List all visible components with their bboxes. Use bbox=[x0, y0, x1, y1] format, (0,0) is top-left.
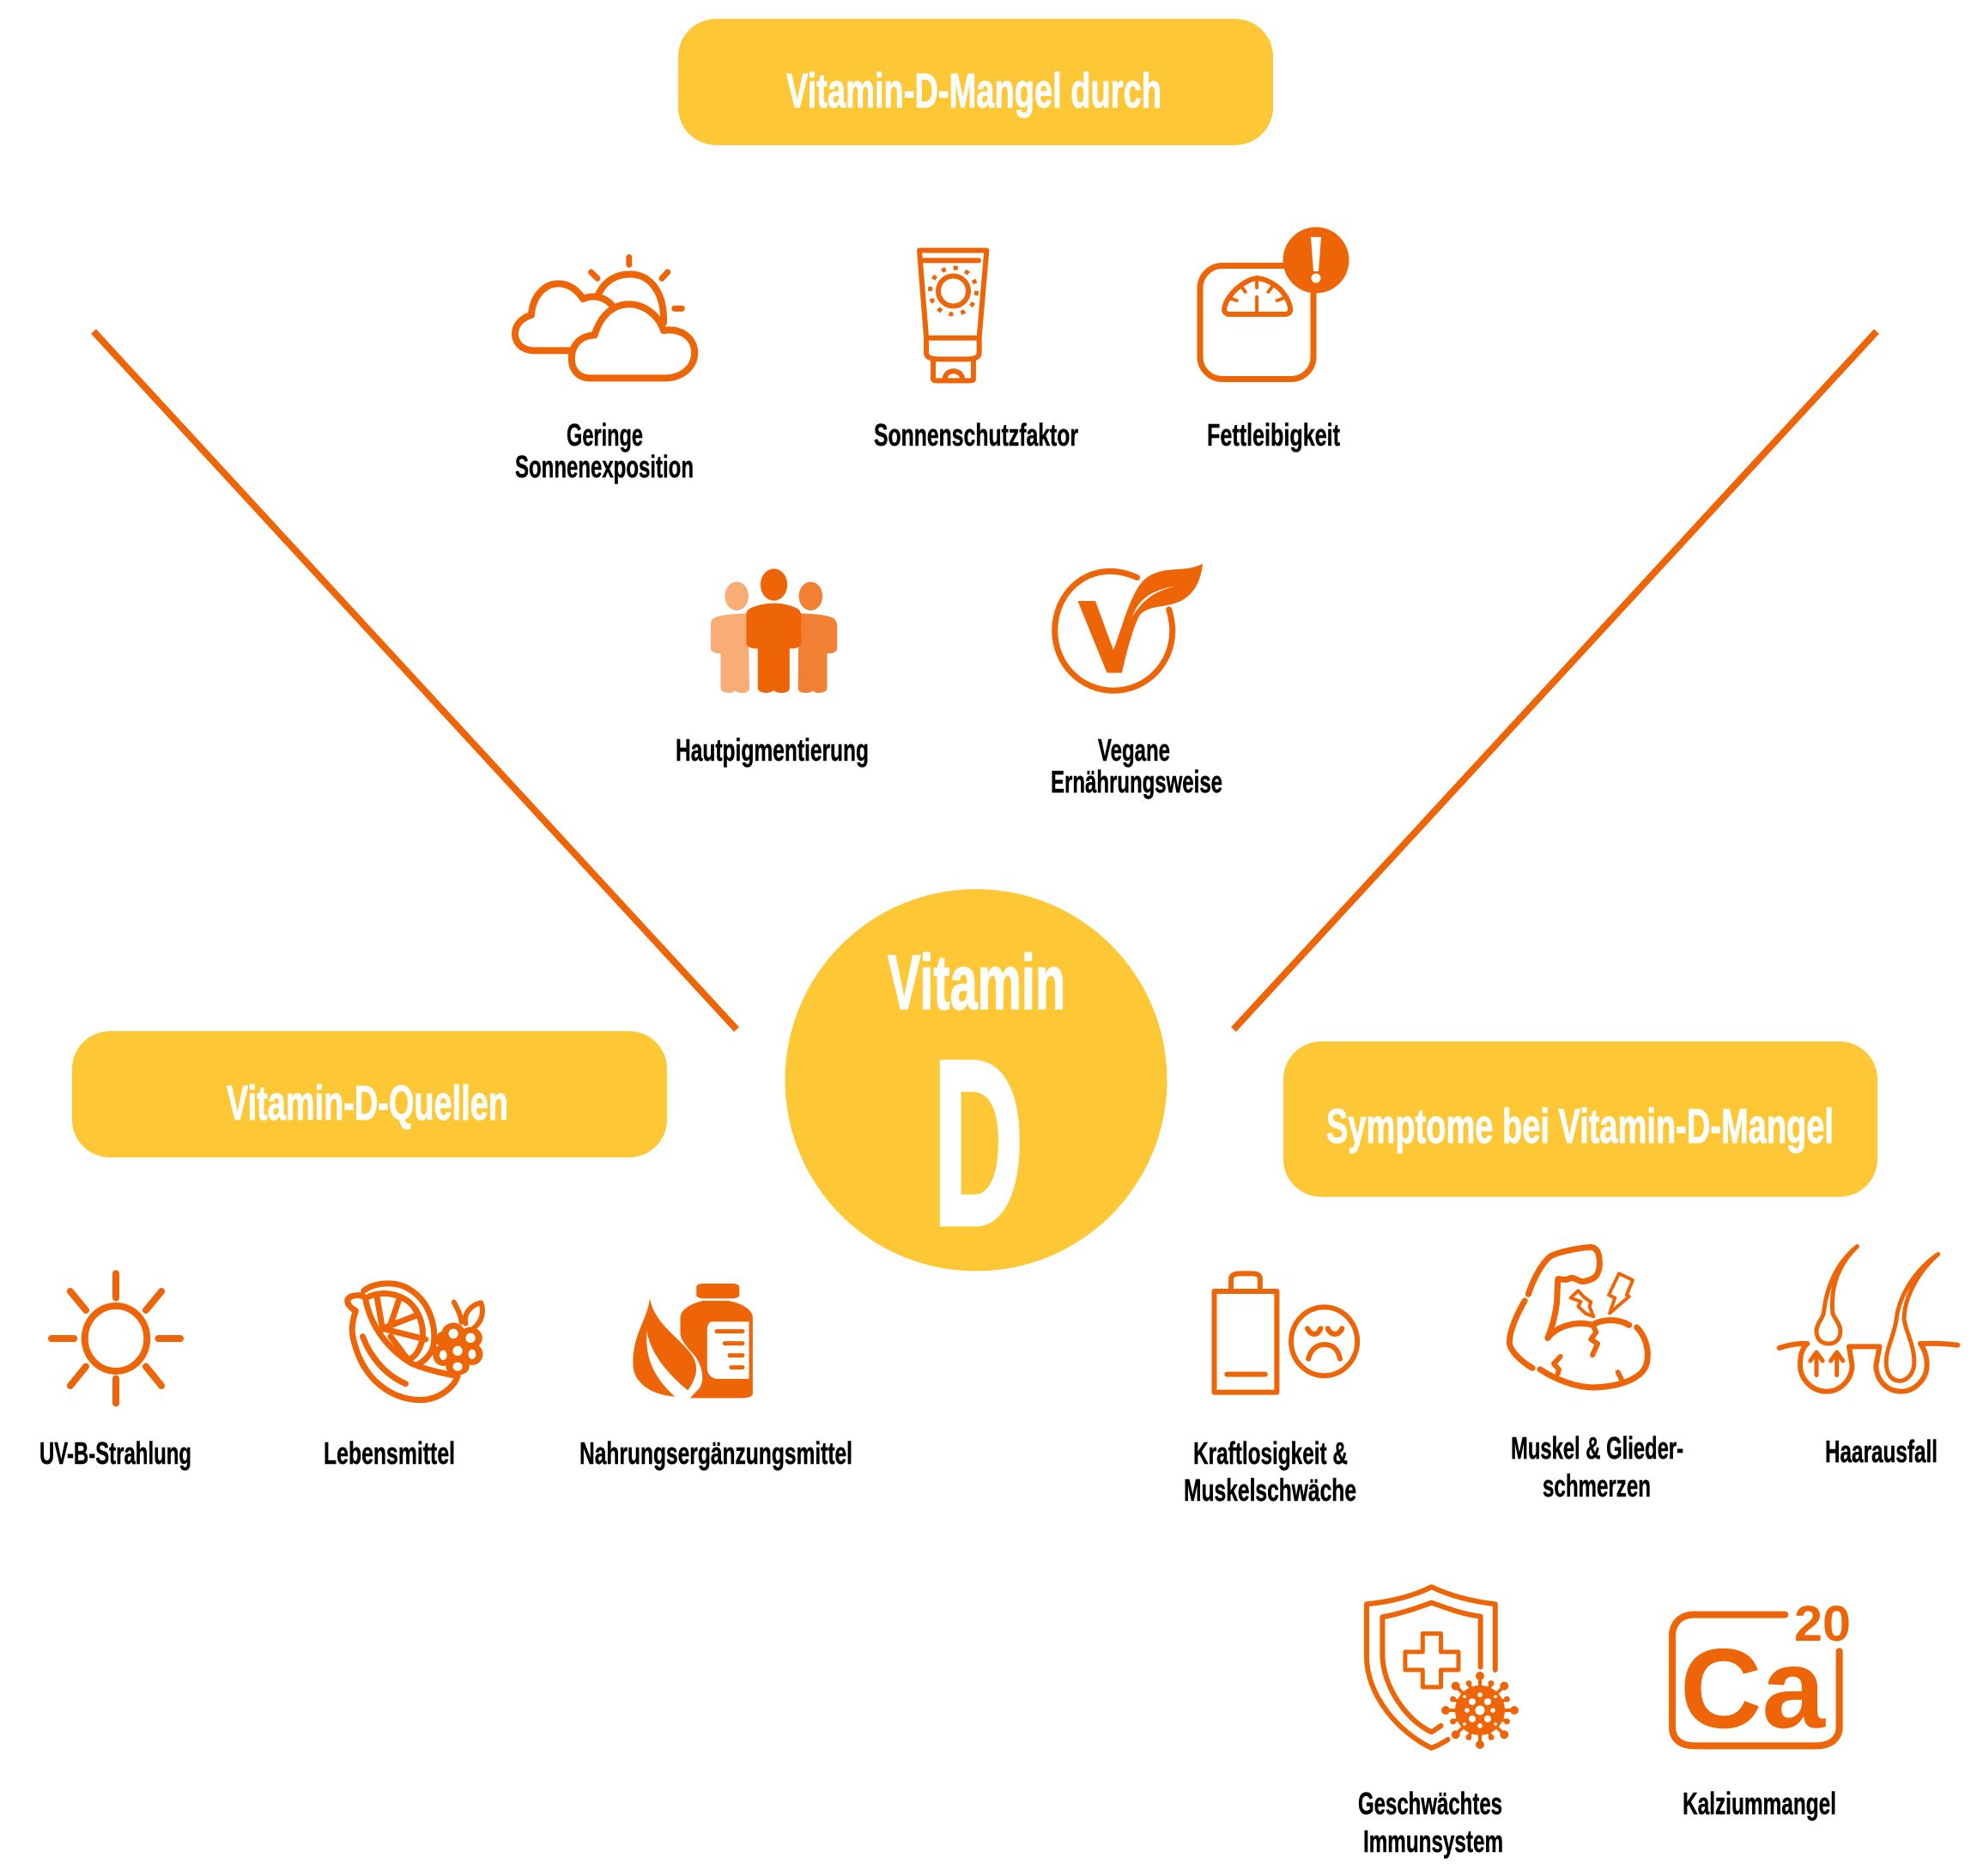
icon: calcium element: 20 bbox=[1794, 1596, 1851, 1652]
label: UV-B-Strahlung: UV-B-Strahlung bbox=[39, 1436, 191, 1471]
label: Hautpigmentierung: Hautpigmentierung bbox=[676, 732, 869, 768]
heading: Vitamin-D-Quellen: Vitamin-D-Quellen bbox=[227, 1076, 508, 1131]
label: Geringe Sonnenexposition: Geringe bbox=[567, 417, 643, 452]
connector line: right bbox=[1234, 331, 1877, 1029]
label: Geringe Sonnenexposition: Sonnenexposition bbox=[515, 449, 694, 484]
icon: shield with virus bbox=[1367, 1587, 1519, 1749]
icon: empty battery and sad face bbox=[1214, 1273, 1357, 1393]
icon: calcium element: Ca bbox=[1680, 1625, 1827, 1752]
label: Muskel & Gliederschmerzen: Muskel & Glieder- bbox=[1511, 1430, 1683, 1466]
icon: fruit bbox=[348, 1284, 482, 1400]
label: Geschwächtes Immunsystem bbox=[1358, 1786, 1503, 1859]
icon: people with different skin tones bbox=[711, 568, 837, 693]
label: Muskel & Gliederschmerzen: schmerzen bbox=[1543, 1468, 1651, 1503]
icon: supplement bottle with leaf bbox=[633, 1284, 753, 1398]
icon: hair follicles bbox=[1780, 1247, 1957, 1392]
heading: Symptome bei Vitamin-D-Mangel bbox=[1283, 1041, 1877, 1197]
icon: clouds and sun bbox=[515, 258, 694, 378]
label: Lebensmittel: Lebensmittel bbox=[324, 1436, 455, 1471]
central circle: Vitamin D bbox=[785, 889, 1167, 1273]
label: Vegane Ernährungsweise bbox=[1051, 732, 1222, 799]
label: Fettleibigkeit: Fettleibigkeit bbox=[1207, 417, 1340, 452]
icon: sun bbox=[52, 1273, 180, 1403]
label: Kraftlosigkeit & Muskelschwäche: Kraftlosigkeit & bbox=[1193, 1436, 1348, 1471]
icon: calcium element bbox=[1672, 1596, 1851, 1752]
icon: vegan V with leaf bbox=[1055, 563, 1203, 690]
label: Kraftlosigkeit & Muskelschwäche bbox=[1184, 1436, 1356, 1508]
label: Sonnenschutzfaktor: Sonnenschutzfaktor bbox=[874, 417, 1078, 452]
icon: flexed arm with pain bolts bbox=[1509, 1248, 1647, 1387]
label: Geringe Sonnenexposition bbox=[515, 417, 694, 484]
icon: sunscreen tube bbox=[919, 251, 986, 380]
central circle: Vitamin D: D bbox=[933, 1012, 1023, 1273]
label: Muskel & Gliederschmerzen bbox=[1511, 1430, 1683, 1503]
label: Geschwächtes Immunsystem: Geschwächtes bbox=[1358, 1786, 1502, 1821]
central circle: Vitamin D: Vitamin bbox=[888, 940, 1065, 1026]
heading: Vitamin-D-Mangel durch bbox=[678, 19, 1273, 145]
icon: scale with warning badge bbox=[1200, 227, 1349, 379]
label: Vegane Ernährungsweise: Ernährungsweise bbox=[1051, 764, 1222, 799]
connector line: left bbox=[94, 331, 737, 1029]
label: Kraftlosigkeit & Muskelschwäche: Muskelschwäche bbox=[1184, 1472, 1356, 1508]
label: Geschwächtes Immunsystem: Immunsystem bbox=[1363, 1824, 1503, 1859]
label: Nahrungsergänzungsmittel: Nahrungsergänzungsmittel bbox=[579, 1436, 852, 1471]
heading: Vitamin-D-Quellen bbox=[72, 1031, 667, 1157]
heading: Vitamin-D-Mangel durch: Vitamin-D-Mangel durch bbox=[786, 64, 1161, 118]
label: Kalziummangel: Kalziummangel bbox=[1683, 1786, 1836, 1821]
label: Vegane Ernährungsweise: Vegane bbox=[1098, 732, 1170, 768]
